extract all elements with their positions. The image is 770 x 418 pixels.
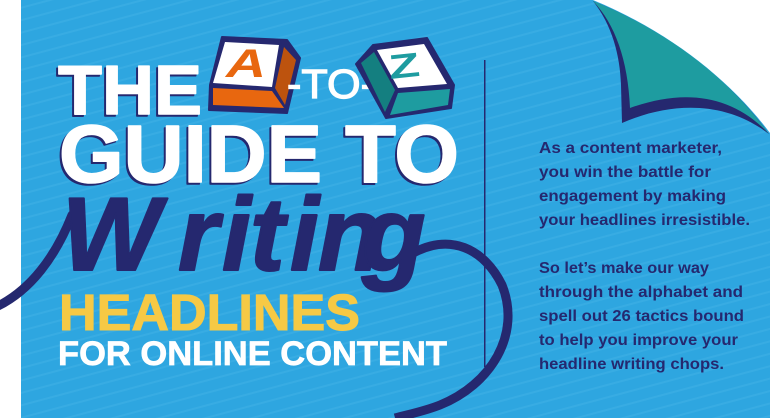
title: GUIDE TO: GUIDE TO: [57, 111, 457, 202]
icon: Z key: Z: [387, 46, 422, 87]
second paragraph: headline writing chops.: [539, 356, 724, 373]
intro paragraph: As a content marketer,: [539, 140, 722, 157]
page curl: [593, 1, 769, 134]
subtitle: HEADLINES: HEADLINES: [59, 284, 360, 341]
intro paragraph: [539, 140, 750, 229]
title: THE: THE: [56, 53, 200, 131]
second paragraph: through the alphabet and: [539, 284, 743, 301]
second paragraph: spell out 26 tactics bound: [539, 308, 744, 325]
title: THE: THE: [58, 51, 202, 129]
intro paragraph: engagement by making: [539, 188, 726, 205]
second paragraph: to help you improve your: [539, 332, 738, 349]
intro paragraph: your headlines irresistible.: [539, 212, 750, 229]
title: GUIDE TO: GUIDE TO: [59, 109, 459, 200]
intro paragraph: you win the battle for: [539, 164, 711, 181]
script title: Writing with swash: Writing: [62, 177, 426, 293]
subtitle: FOR ONLINE CONTENT: FOR ONLINE CONTENT: [58, 335, 447, 373]
second paragraph: [539, 260, 744, 373]
icon: A key: A: [225, 42, 266, 86]
icon: A key: [209, 37, 300, 113]
script title: Writing with swash: [0, 177, 508, 418]
second paragraph: So let’s make our way: [539, 260, 709, 277]
icon: Z key: [356, 38, 454, 118]
divider line: [484, 60, 486, 367]
title: -TO-: -TO-: [287, 61, 375, 107]
